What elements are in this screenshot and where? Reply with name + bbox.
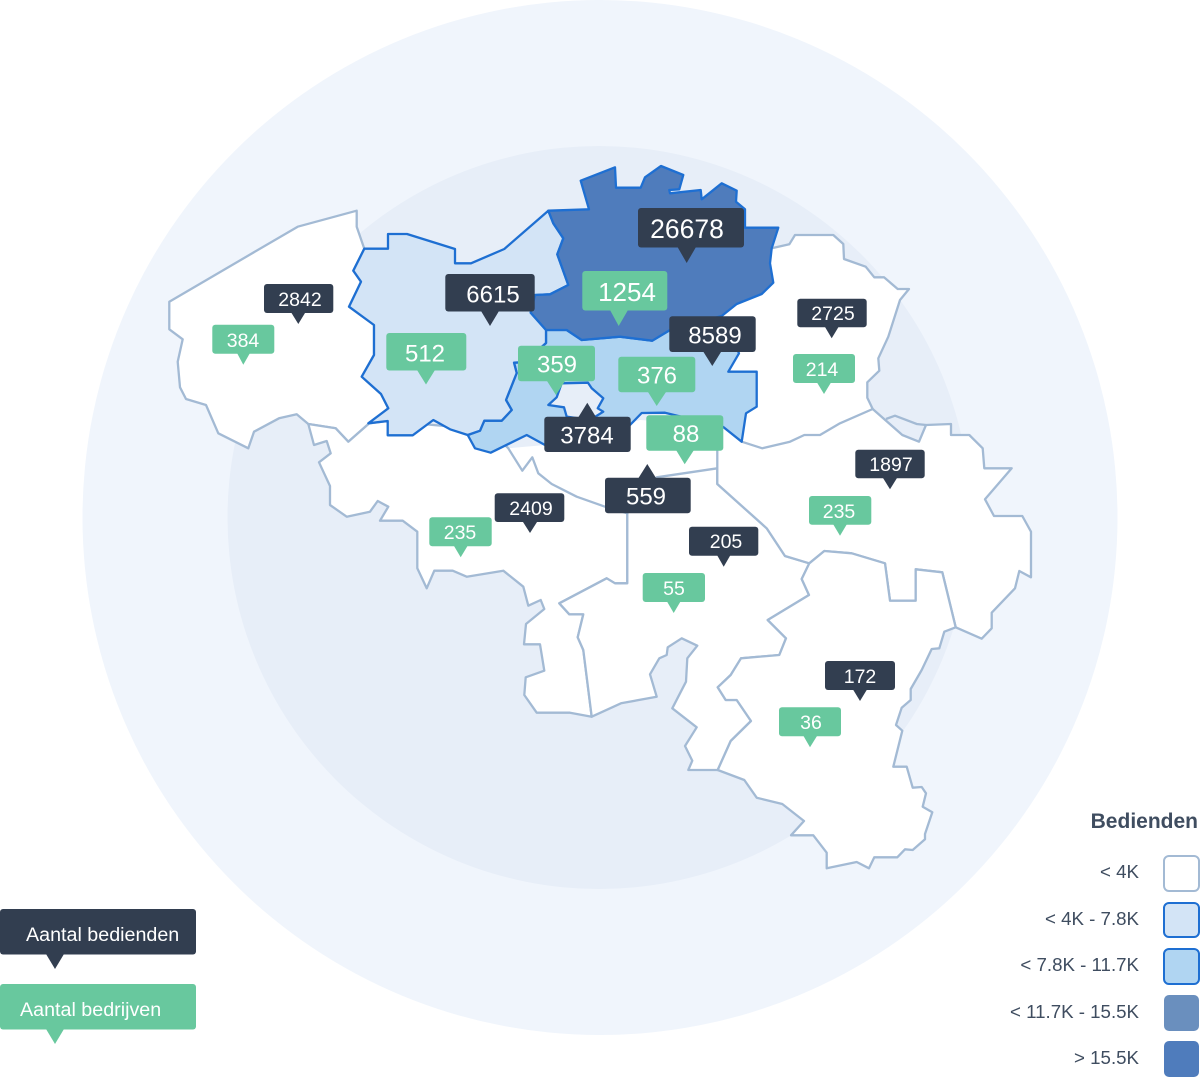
province: West Flanders xyxy=(169,211,388,448)
province: Namur xyxy=(559,468,809,770)
label: 172 employees: 172 xyxy=(844,666,876,688)
label: 1254 companies: 1254 xyxy=(598,277,656,307)
legend title: Bedienden xyxy=(1091,810,1198,833)
label: 559 employees xyxy=(605,464,691,513)
legend row: 7.8K to 11.7K: < 7.8K - 11.7K xyxy=(1020,954,1140,975)
label: 3784 employees: 3784 xyxy=(560,422,614,450)
legend row: 4K to 7.8K xyxy=(1045,903,1199,937)
legend row: 7.8K to 11.7K xyxy=(1020,949,1199,984)
label: 384 companies xyxy=(212,325,274,365)
legend row: 11.7K to 15.5K: < 11.7K - 15.5K xyxy=(1010,1001,1140,1022)
label: 359 companies xyxy=(518,346,595,395)
legend: number of employees xyxy=(0,909,196,969)
legend: number of companies xyxy=(0,984,196,1044)
label: 1897 employees: 1897 xyxy=(869,454,913,476)
label: 214 companies: 214 xyxy=(806,359,838,381)
label: 8589 employees: 8589 xyxy=(688,322,742,350)
label: 55 companies: 55 xyxy=(663,578,685,600)
map of Belgium xyxy=(169,166,1031,868)
label: 88 companies: 88 xyxy=(673,421,699,448)
label: 36 companies: 36 xyxy=(800,712,822,734)
label: 205 employees xyxy=(689,527,758,567)
province: Luxembourg xyxy=(718,551,956,868)
background circle: inner xyxy=(228,146,970,889)
legend: employee ranges xyxy=(1010,810,1199,1077)
label: 376 companies xyxy=(618,357,695,406)
label: 235 companies east: 235 xyxy=(823,501,855,523)
legend row: 11.7K to 15.5K xyxy=(1010,995,1199,1031)
label: 3784 employees xyxy=(544,403,631,452)
province: Flemish Brabant xyxy=(468,316,757,453)
province: Antwerp xyxy=(531,166,778,341)
label: 235 companies east xyxy=(809,496,871,536)
label: 2725 employees: 2725 xyxy=(811,303,855,325)
label: 2409 employees: 2409 xyxy=(509,498,553,520)
label: 359 companies: 359 xyxy=(537,352,577,378)
label: 2725 employees xyxy=(797,299,867,338)
label: 55 companies xyxy=(643,573,705,613)
label: 2842 employees: 2842 xyxy=(278,289,322,311)
label: 559 employees: 559 xyxy=(626,484,666,510)
province: Limburg xyxy=(720,235,909,448)
label: 6615 employees xyxy=(445,274,535,326)
Voeren enclave outline xyxy=(886,416,926,425)
label: 26678 employees: 26678 xyxy=(650,214,724,244)
label: 235 companies west xyxy=(429,517,492,557)
label: 6615 employees: 6615 xyxy=(466,282,520,308)
label: 512 companies xyxy=(386,333,466,384)
province: East Flanders xyxy=(349,211,568,435)
legend row: over 15.5K xyxy=(1074,1041,1199,1077)
label: 376 companies: 376 xyxy=(637,362,677,390)
label: 2842 employees xyxy=(264,284,333,324)
legend row: 4K to 7.8K: < 4K - 7.8K xyxy=(1045,908,1140,929)
province: Walloon Brabant xyxy=(508,420,717,513)
legend: number of employees: Aantal bedienden xyxy=(26,924,179,946)
label: 235 companies west: 235 xyxy=(444,522,476,544)
legend row: over 15.5K: > 15.5K xyxy=(1074,1047,1140,1068)
label: 205 employees: 205 xyxy=(710,531,742,553)
label: 214 companies xyxy=(793,354,855,394)
label: 172 employees xyxy=(825,661,895,701)
province: Hainaut xyxy=(308,421,627,717)
region: Brussels xyxy=(548,383,603,420)
label: 36 companies xyxy=(779,707,841,747)
province: Liege xyxy=(717,409,1031,639)
legend row: under 4K: < 4K xyxy=(1100,861,1140,882)
label: 512 companies: 512 xyxy=(405,340,445,368)
label: 8589 employees xyxy=(669,316,756,366)
legend row: under 4K xyxy=(1100,856,1199,891)
label: 1897 employees xyxy=(855,450,925,489)
label: 2409 employees xyxy=(495,493,564,533)
legend: number of companies: Aantal bedrijven xyxy=(20,999,161,1021)
label: 26678 employees xyxy=(638,208,744,263)
label: 1254 companies xyxy=(582,271,667,326)
label: 88 companies xyxy=(646,415,723,464)
label: 384 companies: 384 xyxy=(227,330,259,352)
